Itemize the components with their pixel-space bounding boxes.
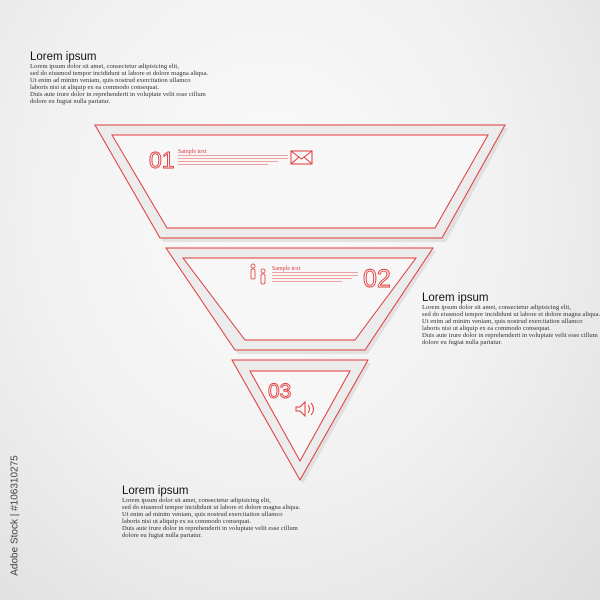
shape 2 (166, 248, 436, 354)
text block: right: Lorem ipsum dolor sit amet, consectetur adipisicing elit, (422, 304, 571, 311)
text block: bottom: dolore eu fugiat nulla pariatur. (122, 532, 202, 539)
text block: top left: Lorem ipsum (30, 51, 96, 63)
text block: right: sed do eiusmod tempor incididunt ut labore et dolore magna aliqua. (422, 311, 600, 318)
text block: right: Lorem ipsum (422, 292, 488, 304)
sample text 1: Sample text (178, 149, 207, 155)
sample text 2 (272, 266, 358, 282)
text block: right: dolore eu fugiat nulla pariatur. (422, 339, 502, 346)
watermark id: Adobe Stock | #106310275 (10, 455, 20, 576)
number 03: 03 (268, 380, 291, 403)
text block: bottom: Lorem ipsum dolor sit amet, consectetur adipisicing elit, (122, 497, 271, 504)
text block: bottom: Ut enim ad minim veniam, quis nostrud exercitation ullamco (122, 511, 283, 518)
text block: right: Ut enim ad minim veniam, quis nostrud exercitation ullamco (422, 318, 583, 325)
text block: right: Duis aute irure dolor in reprehenderit in voluptate velit esse cillum (422, 332, 598, 339)
text block: bottom: Duis aute irure dolor in reprehenderit in voluptate velit esse cillum (122, 525, 298, 532)
text block: top left: Duis aute irure dolor in reprehenderit in voluptate velit esse cillum (30, 91, 206, 98)
shape 3 (232, 360, 371, 484)
sample text 1 (178, 149, 288, 165)
shape 1 (95, 125, 508, 242)
number 02: 02 (363, 265, 391, 293)
text block: bottom: laboris nisi ut aliquip ex ea commodo consequat. (122, 518, 251, 525)
text block: top left (30, 51, 208, 105)
text block: top left: Ut enim ad minim veniam, quis nostrud exercitation ullamco (30, 77, 191, 84)
text block: top left: sed do eiusmod tempor incididunt ut labore et dolore magna aliqua. (30, 70, 208, 77)
icon: people (251, 264, 265, 284)
text block: top left: Lorem ipsum dolor sit amet, consectetur adipisicing elit, (30, 63, 179, 70)
sample text 2: Sample text (272, 266, 301, 272)
text block: bottom: Lorem ipsum (122, 485, 188, 497)
text block: bottom (122, 485, 300, 539)
text block: top left: dolore eu fugiat nulla pariatur. (30, 98, 110, 105)
icon: speaker (296, 402, 314, 416)
icon: envelope (291, 151, 312, 164)
text block: right: laboris nisi ut aliquip ex ea commodo consequat. (422, 325, 551, 332)
number 01: 01 (149, 147, 175, 173)
text block: top left: laboris nisi ut aliquip ex ea commodo consequat. (30, 84, 159, 91)
text block: bottom: sed do eiusmod tempor incididunt ut labore et dolore magna aliqua. (122, 504, 300, 511)
text block: right (422, 292, 600, 346)
